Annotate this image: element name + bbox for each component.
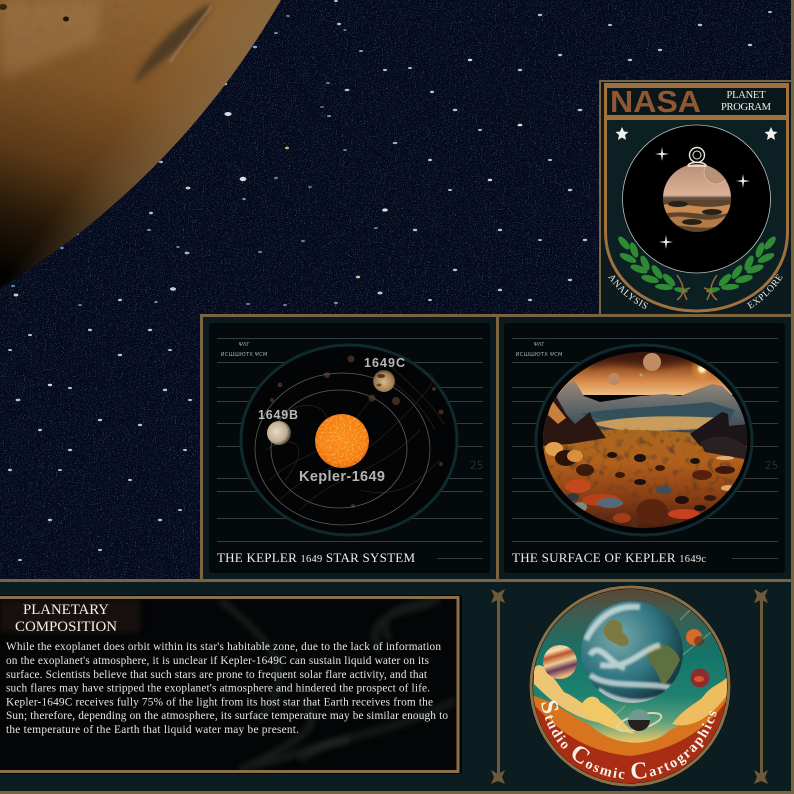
jupiter xyxy=(543,645,577,679)
program title: PLANET xyxy=(726,90,766,101)
curved label analysis: ANALYSIS xyxy=(608,276,648,309)
panel: studio logo section xyxy=(491,585,768,787)
body text: Sun; therefore, depending on the atmosphere, its surface temperature may be similar enough to xyxy=(6,710,448,722)
program title xyxy=(721,90,772,113)
curved label explore: EXPLORE xyxy=(746,274,783,309)
mini script label: ΨΛΓ xyxy=(239,342,249,348)
heading: PLANETARY xyxy=(23,602,109,618)
body text: surface. Scientists believe that such stars are prone to frequent solar flare activity, and that xyxy=(6,669,428,681)
body text: While the exoplanet does orbit within its star's habitable zone, due to the lack of information xyxy=(6,641,441,653)
emblem planet xyxy=(663,160,731,232)
planet 1649B xyxy=(267,421,291,445)
body text xyxy=(6,641,448,736)
number 25: 25 xyxy=(765,460,778,472)
small planet red xyxy=(690,668,710,688)
circular emblem xyxy=(622,125,770,273)
mini script label xyxy=(516,342,562,358)
caption star system: THE KEPLER 1649 STAR SYSTEM xyxy=(217,550,415,565)
sun xyxy=(315,414,369,468)
logo roundel xyxy=(529,585,731,787)
planet: large exoplanet limb xyxy=(0,0,281,288)
mini script label: ΨΛΓ xyxy=(534,342,544,348)
panel: star system xyxy=(203,317,496,579)
mini script label: ИСШШЮΤΧ ΨСΜ xyxy=(220,352,268,358)
astronaut helmet xyxy=(688,148,706,166)
planet 1649C xyxy=(373,370,395,392)
heading: COMPOSITION xyxy=(15,619,117,635)
mini script label: ИСШШЮΤΧ ΨСΜ xyxy=(516,352,562,358)
small planet orange xyxy=(686,629,704,646)
star right xyxy=(764,127,778,140)
laurel stems xyxy=(677,275,717,300)
program title: PROGRAM xyxy=(721,102,772,113)
surface landscape xyxy=(536,345,752,540)
studio name arc: Studio Cosmic Cartographics xyxy=(542,700,717,779)
body text: the temperature of the Earth that liquid water may be present. xyxy=(6,724,299,736)
earth xyxy=(581,601,683,703)
saturn xyxy=(615,709,663,735)
label Kepler-1649: Kepler-1649 xyxy=(299,469,385,485)
body text: such flares may have stripped the exoplanet's atmosphere and hindered the prospect of life. xyxy=(6,682,430,694)
NASA wordmark: NASA xyxy=(610,84,701,119)
body text: on the exoplanet's atmosphere, it is unclear if Kepler-1649C can sustain liquid water on its xyxy=(6,655,429,667)
sparkle stars xyxy=(655,147,750,249)
caption surface: THE SURFACE OF KEPLER 1649c xyxy=(512,550,706,565)
badge: NASA planet program shield xyxy=(599,80,791,314)
laurel wreath xyxy=(616,235,778,294)
panel: planetary composition xyxy=(0,595,462,774)
body text: Kepler-1649C receives fully 75% of the light from its host star that Earth receives from the xyxy=(6,696,433,708)
star left xyxy=(616,127,628,140)
heading xyxy=(15,602,117,635)
label 1649B: 1649B xyxy=(258,408,298,422)
side rails with ornaments xyxy=(491,589,768,784)
number 25: 25 xyxy=(470,460,483,472)
bottom band background xyxy=(0,582,791,791)
panel: surface of Kepler 1649c xyxy=(499,317,791,579)
label 1649C: 1649C xyxy=(364,356,405,370)
mini script label xyxy=(220,342,268,358)
orbit diagram xyxy=(241,345,457,535)
